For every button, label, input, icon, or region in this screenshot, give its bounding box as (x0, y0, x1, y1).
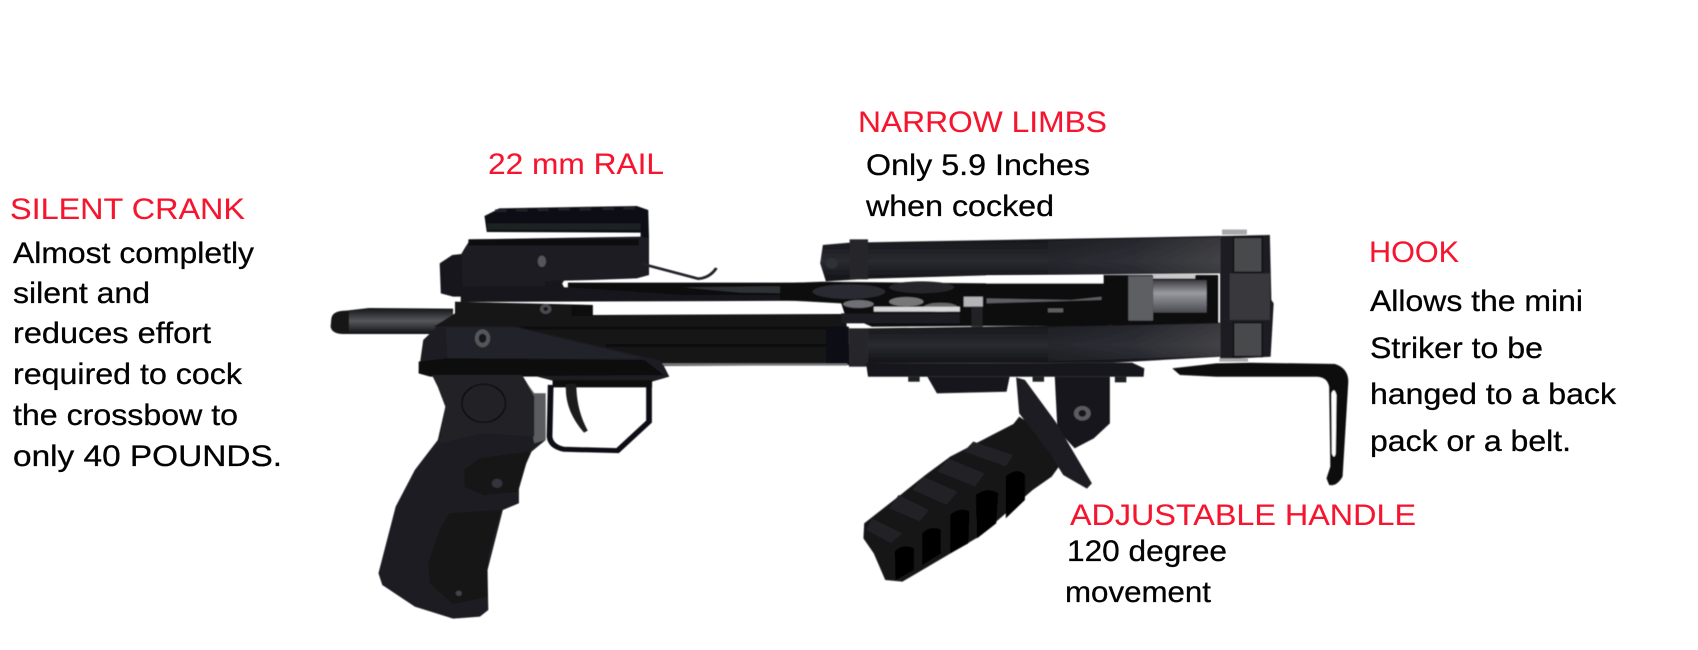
description: narrow limbs: Only 5.9 Inches (866, 149, 1090, 182)
description: hook (1370, 285, 1617, 458)
roller assembly (1103, 275, 1218, 325)
hook (1172, 363, 1348, 485)
heading: narrow limbs: NARROW LIMBS (858, 106, 1107, 139)
rail mount block (461, 237, 649, 287)
heading: silent crank: SILENT CRANK (10, 193, 245, 226)
stock wedge (419, 326, 669, 382)
22 mm rail (484, 206, 649, 240)
description: hook: hanged to a back (1370, 378, 1617, 411)
heading: adjustable handle: ADJUSTABLE HANDLE (1070, 499, 1416, 532)
adjustable handle grip (863, 417, 1071, 582)
description: narrow limbs (865, 149, 1090, 223)
description: hook: Striker to be (1370, 332, 1543, 365)
end block (1220, 235, 1274, 359)
handle mount (1055, 377, 1110, 448)
trigger guard (550, 382, 649, 451)
crank handle (331, 308, 453, 334)
grip texture pads (465, 452, 530, 495)
callout: adjustable handle (1065, 499, 1416, 609)
handle flange (1016, 377, 1092, 489)
prod, mechanism, handle and hook (780, 229, 1348, 582)
upper beam (461, 280, 824, 302)
description: silent crank: the crossbow to (13, 399, 238, 432)
description: adjustable handle (1065, 535, 1227, 609)
upper limb (820, 236, 1220, 281)
heading: hook: HOOK (1369, 236, 1459, 269)
callout: 22 mm rail: 22 mm RAIL (488, 148, 664, 181)
description: hook: pack or a belt. (1370, 425, 1571, 458)
description: silent crank: required to cock (13, 358, 243, 391)
trigger (566, 384, 588, 433)
description: narrow limbs: when cocked (865, 190, 1054, 223)
centre mechanism (780, 282, 1109, 327)
safety wire (643, 264, 716, 279)
callout: hook (1369, 236, 1617, 458)
description: hook: Allows the mini (1370, 285, 1583, 318)
description: silent crank (13, 237, 282, 473)
description: adjustable handle: movement (1065, 576, 1212, 609)
rear stock, rail and pistol grip (331, 206, 851, 619)
crossbow illustration (331, 206, 1348, 619)
description: silent crank: silent and (13, 277, 150, 310)
description: silent crank: Almost completly (13, 237, 254, 270)
callout: narrow limbs (858, 106, 1107, 223)
callout: silent crank (10, 193, 282, 473)
description: silent crank: only 40 POUNDS. (13, 440, 282, 473)
lower limb (868, 323, 1220, 363)
description: adjustable handle: 120 degree (1067, 535, 1227, 568)
lower receiver (434, 302, 851, 366)
under rail plate (866, 363, 1144, 377)
description: silent crank: reduces effort (13, 317, 212, 350)
pistol grip (378, 375, 546, 619)
